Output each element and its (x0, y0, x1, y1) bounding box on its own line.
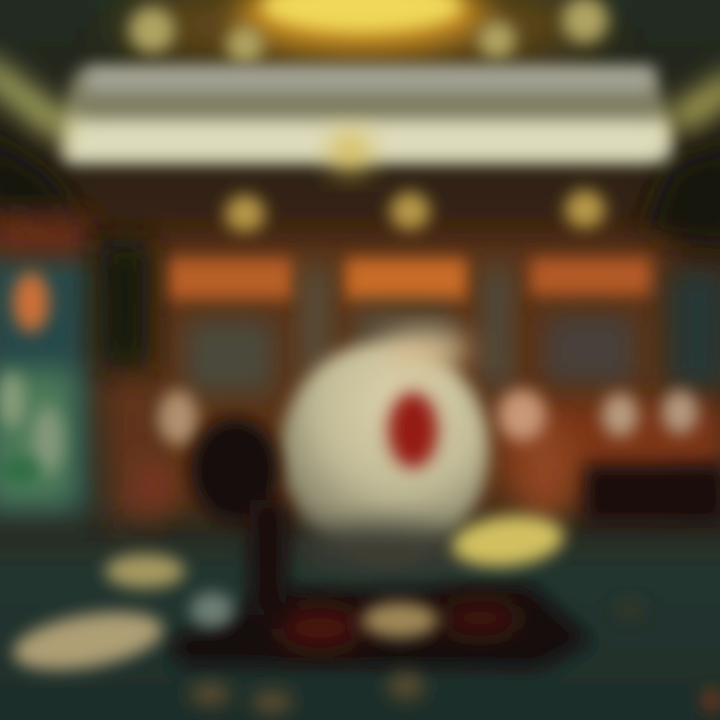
floor disc upper left (105, 554, 185, 588)
brown pillar (110, 380, 155, 520)
wall panels (150, 240, 720, 510)
dark pedestal (170, 585, 590, 668)
lower ceiling lights (225, 190, 605, 235)
dark corner left (0, 130, 110, 260)
floor disc on pedestal (362, 602, 438, 638)
bright floor disc (450, 510, 566, 572)
floor disc lower left (9, 602, 167, 680)
dark figure (191, 418, 286, 615)
small floor spots (190, 600, 720, 714)
dark corner right (640, 140, 720, 250)
pale teal blob (190, 592, 234, 628)
big ball (281, 332, 489, 574)
ceiling light band (60, 66, 672, 172)
ceiling top glow (120, 0, 600, 70)
left diagonal light stripe (0, 52, 76, 140)
right diagonal light stripe (666, 68, 720, 132)
right tables (498, 389, 720, 523)
left wall poster (0, 215, 90, 515)
dark column by poster (100, 240, 150, 370)
red spot on ball (388, 392, 438, 468)
upper ceiling lights (129, 0, 608, 64)
left wall figures (137, 390, 198, 515)
